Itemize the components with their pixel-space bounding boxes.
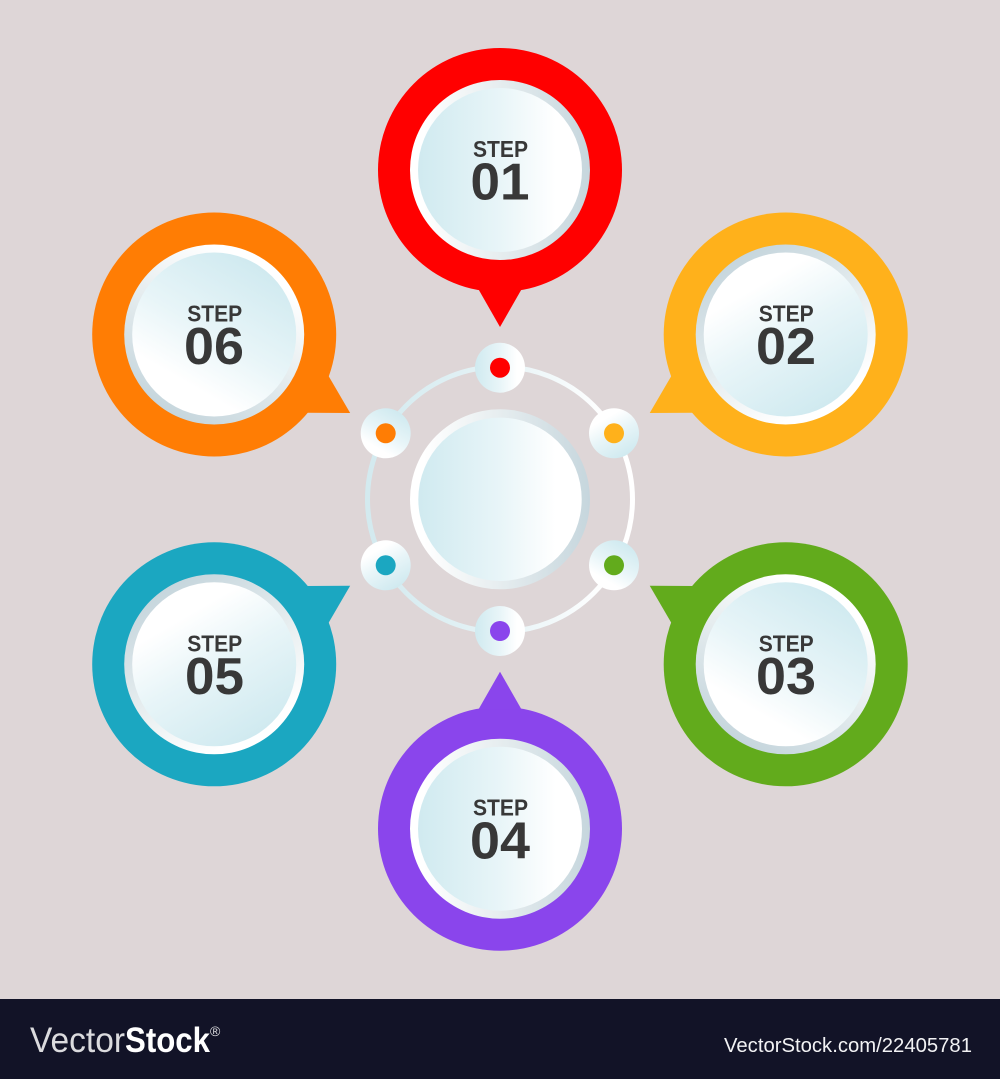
- number: 02: [756, 318, 816, 376]
- center circle bezel: [410, 409, 590, 589]
- node: step 03: [589, 540, 639, 590]
- bezel: [410, 80, 590, 260]
- disc: [418, 88, 582, 252]
- pin body: [378, 48, 622, 327]
- label: STEP: [187, 630, 242, 656]
- disc: [704, 252, 868, 416]
- panel: step 04: [378, 672, 622, 951]
- node: step 01: [475, 343, 525, 393]
- panel: step 05: [92, 542, 361, 786]
- number: 04: [470, 812, 530, 870]
- center circle disc: [418, 418, 582, 581]
- central hub: [361, 343, 639, 656]
- logo wordmark: Stock: [125, 1021, 210, 1060]
- bezel: [696, 244, 876, 424]
- number: 05: [185, 648, 244, 706]
- number: 03: [756, 648, 816, 706]
- label: STEP: [473, 136, 528, 162]
- bezel: [410, 739, 590, 919]
- bezel: [696, 574, 876, 754]
- node: step 05: [361, 540, 411, 590]
- number: 06: [184, 318, 244, 376]
- panel: step 02: [639, 212, 908, 456]
- disc: [418, 747, 582, 911]
- image id url: VectorStock.com/22405781: [724, 1035, 972, 1057]
- pin body: [378, 672, 622, 951]
- panel: step 01: [378, 48, 622, 327]
- label: STEP: [759, 300, 814, 326]
- logo wordmark: ®: [210, 1023, 221, 1039]
- orbit ring: [368, 367, 632, 632]
- label: STEP: [187, 300, 242, 326]
- label: STEP: [759, 630, 814, 656]
- bezel: [124, 244, 304, 424]
- panel: step 06: [92, 212, 361, 456]
- label: STEP: [473, 795, 528, 821]
- bezel: [124, 574, 304, 754]
- footer bar: [0, 999, 1000, 1079]
- disc: [132, 582, 296, 746]
- node: step 06: [361, 408, 411, 458]
- pin body: [639, 212, 908, 456]
- node: step 04: [475, 606, 525, 656]
- pin body: [92, 212, 361, 456]
- panel: step 03: [639, 542, 908, 786]
- logo wordmark: [30, 1021, 221, 1060]
- node: step 02: [589, 408, 639, 458]
- logo wordmark: Vector: [30, 1021, 125, 1060]
- pin body: [639, 542, 908, 786]
- disc: [132, 252, 296, 416]
- disc: [704, 582, 868, 746]
- pin body: [92, 542, 361, 786]
- number: 01: [470, 154, 530, 212]
